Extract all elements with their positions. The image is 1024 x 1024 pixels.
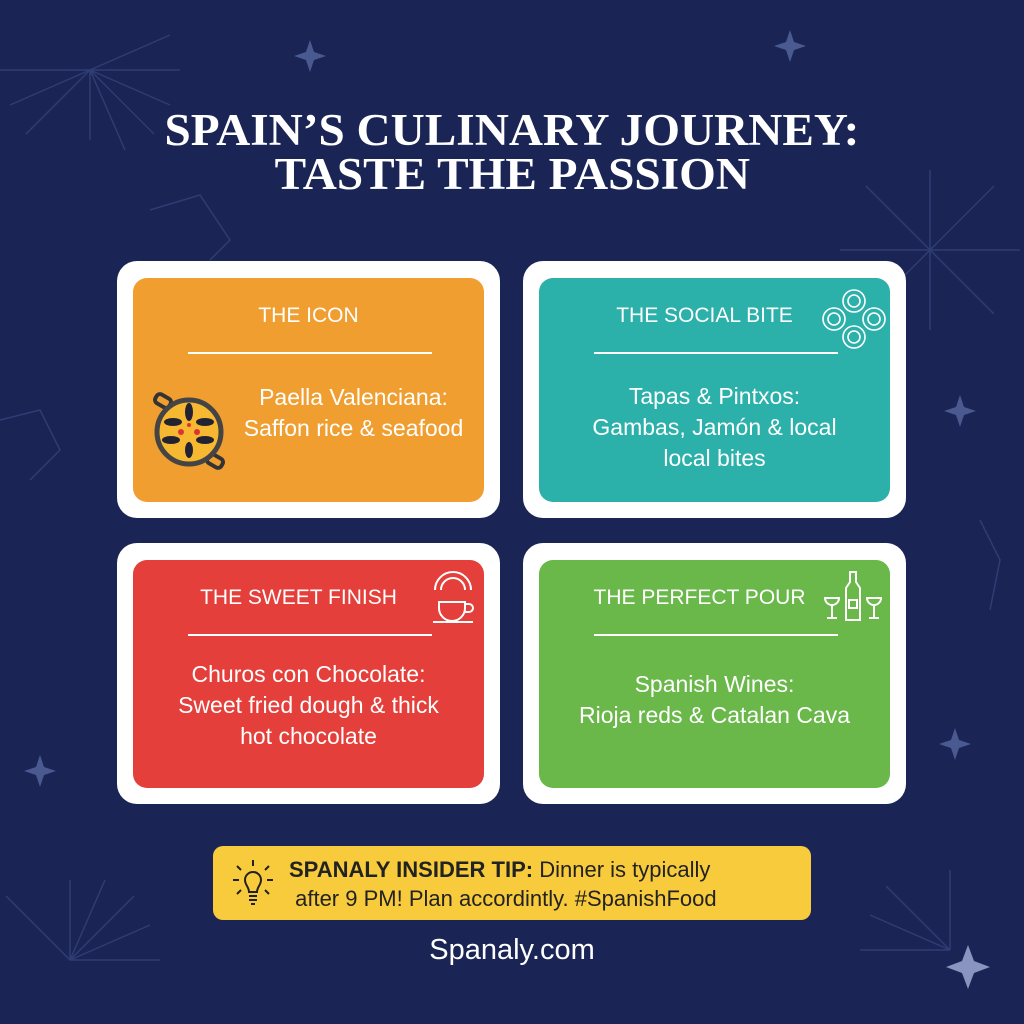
text: paella bbox=[244, 384, 463, 441]
icon: wine bbox=[824, 571, 882, 621]
panel: the icon bbox=[117, 261, 500, 518]
title: SPAIN’S CULINARY JOURNEY: bbox=[165, 105, 859, 155]
text: tip bbox=[289, 857, 717, 911]
panel: the social bite bbox=[523, 261, 906, 518]
text: wines: Spanish Wines: bbox=[635, 671, 794, 697]
text: churros: Churos con Chocolate: bbox=[192, 661, 425, 687]
heading: the icon: THE ICON bbox=[258, 304, 359, 327]
panel: the perfect pour bbox=[523, 543, 906, 804]
text: churros: hot chocolate bbox=[240, 723, 377, 749]
text: wines bbox=[579, 671, 850, 728]
icon: tapas plates bbox=[822, 289, 886, 349]
footer: website: Spanaly.com bbox=[429, 934, 595, 966]
text: churros: Sweet fried dough & thick bbox=[178, 692, 439, 718]
icon: cup bbox=[433, 571, 474, 623]
text: wines: Rioja reds & Catalan Cava bbox=[579, 702, 850, 728]
text: tapas bbox=[592, 383, 837, 471]
text: churros bbox=[178, 661, 439, 749]
title: TASTE THE PASSION bbox=[274, 149, 750, 199]
icon: paella pan bbox=[153, 392, 225, 470]
text: tapas: Tapas & Pintxos: bbox=[629, 383, 800, 409]
text: paella: Paella Valenciana: bbox=[259, 384, 448, 410]
panel: the sweet finish bbox=[117, 543, 500, 804]
heading: perfect pour: THE PERFECT POUR bbox=[594, 586, 805, 609]
text: tip: SPANALY INSIDER TIP: Dinner is typically bbox=[289, 857, 710, 882]
title bbox=[165, 105, 859, 199]
text: tapas: local bites bbox=[663, 445, 766, 471]
text: paella: Saffon rice & seafood bbox=[244, 415, 463, 441]
icon: lightbulb bbox=[233, 860, 273, 905]
text: tapas: Gambas, Jamón & local bbox=[592, 414, 837, 440]
heading: sweet finish: THE SWEET FINISH bbox=[200, 586, 397, 609]
text: tip: after 9 PM! Plan accordintly. #SpanishFood bbox=[295, 886, 717, 911]
callout: insider tip bbox=[213, 846, 811, 920]
heading: social bite: THE SOCIAL BITE bbox=[616, 304, 793, 327]
